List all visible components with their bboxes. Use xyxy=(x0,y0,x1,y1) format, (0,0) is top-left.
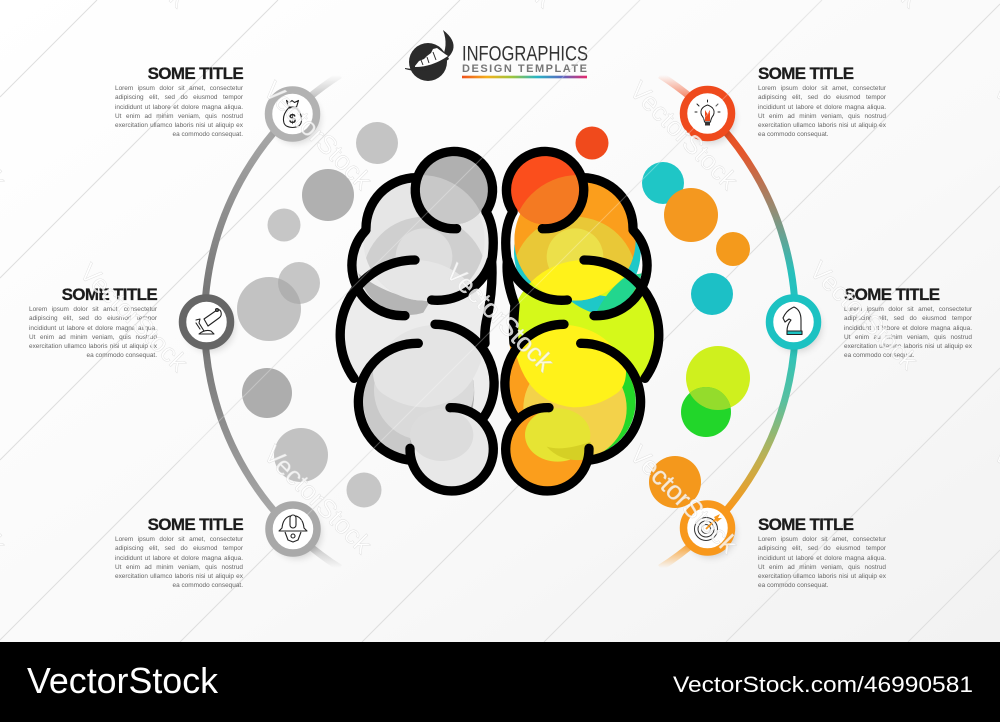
text block: middle left: Lorem ipsum dolor sit amet, consectetur xyxy=(29,306,157,313)
text block: top right: Ut enim ad minim veniam, quis nostrud xyxy=(758,113,886,120)
logo rainbow bar xyxy=(462,76,587,78)
left gray bubbles xyxy=(237,122,398,508)
icon: microscope xyxy=(196,308,221,334)
text block: bottom left: ea commodo consequat. xyxy=(172,582,243,589)
logo mark xyxy=(405,30,454,81)
footer bar xyxy=(0,642,1000,722)
text block: bottom left: SOME TITLE xyxy=(148,515,243,534)
node: helmet xyxy=(269,505,321,558)
logo subtitle: DESIGN TEMPLATE xyxy=(462,63,587,75)
logo title: INFOGRAPHICS xyxy=(462,42,588,66)
watermark overlay: VectorStock xyxy=(258,75,379,196)
text block: top left xyxy=(115,64,244,138)
text block: bottom right: adipiscing elit, sed do eiusmod tempor xyxy=(758,545,886,552)
footer logo: VectorStock xyxy=(27,660,219,701)
node: chess knight xyxy=(770,298,821,351)
text block: middle left: adipiscing elit, sed do eiusmod tempor xyxy=(29,315,157,322)
text block: top right: ea commodo consequat. xyxy=(758,131,828,138)
text block: bottom left: Lorem ipsum dolor sit amet, consectetur xyxy=(115,536,243,543)
text block: top right: incididunt ut labore et dolore magna aliqua. xyxy=(758,104,886,111)
text block: top right xyxy=(758,64,886,138)
text block: top left: ea commodo consequat. xyxy=(172,131,243,138)
text block: middle left: SOME TITLE xyxy=(62,285,157,304)
watermark overlay: VectorStock xyxy=(624,439,745,560)
watermark overlay: VectorStock xyxy=(74,257,195,378)
text block: bottom left: adipiscing elit, sed do eiusmod tempor xyxy=(115,545,243,552)
text block: middle right: Lorem ipsum dolor sit amet, consectetur xyxy=(844,306,972,313)
text block: bottom left: exercitation ullamco laboris nisi ut aliquip ex xyxy=(115,573,243,580)
text block: bottom right: exercitation ullamco laboris nisi ut aliquip ex xyxy=(758,573,886,580)
text block: bottom right: incididunt ut labore et dolore magna aliqua. xyxy=(758,555,886,562)
left curved connector xyxy=(205,75,340,568)
text block: bottom right: SOME TITLE xyxy=(758,515,853,534)
text block: bottom right: Lorem ipsum dolor sit amet, consectetur xyxy=(758,536,886,543)
text block: bottom left: incididunt ut labore et dolore magna aliqua. xyxy=(115,555,243,562)
text block: middle left: Ut enim ad minim veniam, quis nostrud xyxy=(29,334,157,341)
node: money bag xyxy=(268,90,320,143)
icon: target with arrow xyxy=(694,514,722,540)
text block: top right: Lorem ipsum dolor sit amet, consectetur xyxy=(758,85,886,92)
watermark overlay: VectorStock xyxy=(440,257,561,378)
text block: bottom left: Ut enim ad minim veniam, quis nostrud xyxy=(115,564,243,571)
logo xyxy=(405,30,588,81)
text block: top left: exercitation ullamco laboris nisi ut aliquip ex xyxy=(115,122,243,129)
node: light bulb xyxy=(684,90,735,143)
text block: top right: exercitation ullamco laboris nisi ut aliquip ex xyxy=(758,122,886,129)
text block: middle right: ea commodo consequat. xyxy=(844,352,914,359)
text block: bottom right: ea commodo consequat. xyxy=(758,582,828,589)
text block: bottom right: Ut enim ad minim veniam, quis nostrud xyxy=(758,564,886,571)
text block: middle right: SOME TITLE xyxy=(844,285,939,304)
right curved connector xyxy=(660,75,795,568)
text block: middle right: adipiscing elit, sed do eiusmod tempor xyxy=(844,315,972,322)
node: target xyxy=(684,504,735,557)
left hemisphere outlines xyxy=(340,151,494,491)
right hemisphere fills xyxy=(509,156,654,486)
footer id: VectorStock.com/46990581 xyxy=(673,672,973,697)
node: microscope xyxy=(182,298,234,351)
text block: top left: SOME TITLE xyxy=(148,64,243,83)
text block: top left: Ut enim ad minim veniam, quis nostrud xyxy=(115,113,243,120)
text block: middle left: exercitation ullamco laboris nisi ut aliquip ex xyxy=(29,343,157,350)
text block: top left: adipiscing elit, sed do eiusmod tempor xyxy=(115,94,243,101)
text block: top right: SOME TITLE xyxy=(758,64,853,83)
icon: light bulb xyxy=(695,100,720,126)
text block: middle left: incididunt ut labore et dolore magna aliqua. xyxy=(29,325,157,332)
watermark overlay: VectorStock xyxy=(804,255,925,376)
text block: bottom right xyxy=(758,515,886,589)
brain xyxy=(330,130,663,510)
icon: money bag: $ xyxy=(289,112,296,126)
text block: middle right: Ut enim ad minim veniam, quis nostrud xyxy=(844,334,972,341)
right colored bubbles xyxy=(576,126,750,508)
text block: bottom left xyxy=(115,515,244,589)
watermark overlay: VectorStock xyxy=(258,439,379,560)
watermark overlay: VectorStock xyxy=(624,75,745,196)
text block: middle right xyxy=(844,285,972,359)
right hemisphere outlines xyxy=(505,151,659,491)
text block: middle left: ea commodo consequat. xyxy=(86,352,157,359)
text block: middle right: exercitation ullamco laboris nisi ut aliquip ex xyxy=(844,343,972,350)
text block: top left: Lorem ipsum dolor sit amet, consectetur xyxy=(115,85,243,92)
icon: helmet with gear xyxy=(279,515,307,542)
text block: middle left xyxy=(29,285,158,359)
icon: chess knight xyxy=(783,307,802,334)
text block: middle right: incididunt ut labore et dolore magna aliqua. xyxy=(844,325,972,332)
left hemisphere fills xyxy=(345,156,490,486)
text block: top right: adipiscing elit, sed do eiusmod tempor xyxy=(758,94,886,101)
text block: top left: incididunt ut labore et dolore magna aliqua. xyxy=(115,104,243,111)
